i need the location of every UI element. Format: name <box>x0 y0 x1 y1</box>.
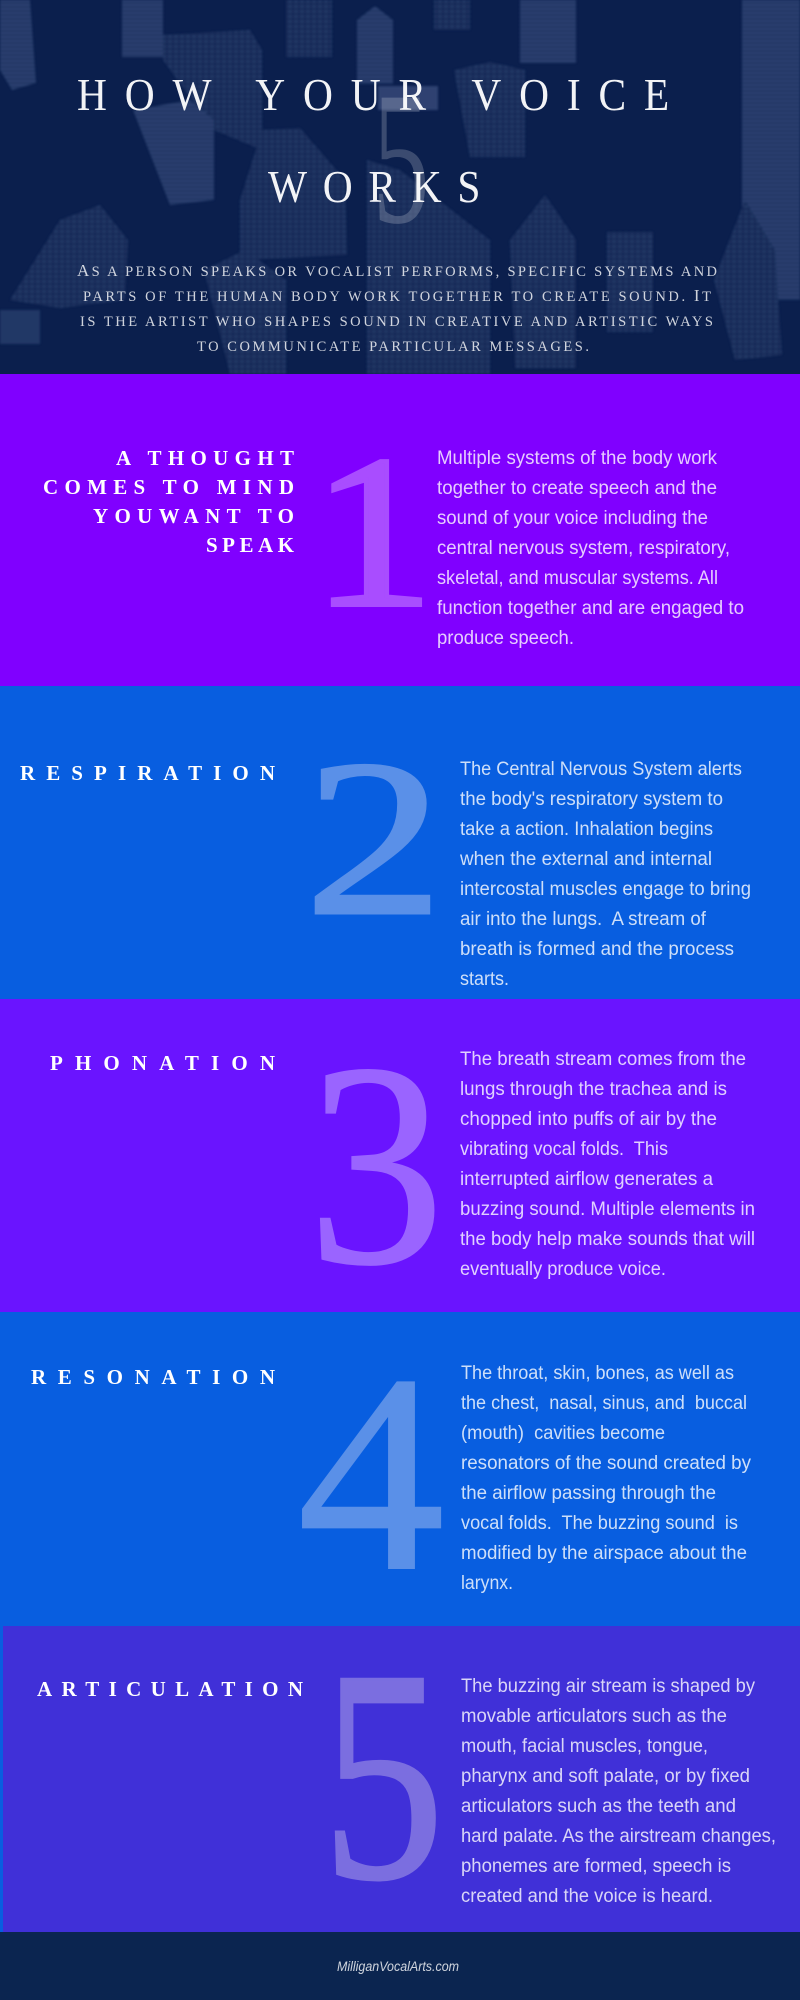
heading: a thought comes to mind: COMES TO MIND <box>43 475 294 499</box>
intro text: TO COMMUNICATE PARTICULAR MESSAGES. <box>197 339 589 355</box>
body text: modified by the airspace about the <box>461 1543 747 1564</box>
body text: the chest, nasal, sinus, and buccal <box>461 1393 747 1414</box>
body text: vocal folds. The buzzing sound is <box>461 1513 738 1534</box>
body text: sound of your voice including the <box>437 508 708 529</box>
body text: eventually produce voice. <box>460 1259 666 1280</box>
title: HOW YOUR VOICE <box>77 70 669 121</box>
body text: the airflow passing through the <box>461 1483 716 1504</box>
body text: The throat, skin, bones, as well as <box>461 1363 734 1384</box>
numeral 4: 4 <box>297 1318 445 1630</box>
body text <box>459 759 751 990</box>
body text: The Central Nervous System alerts <box>460 759 742 780</box>
intro text: IS THE ARTIST WHO SHAPES SOUND IN CREATIVE AND ARTISTIC WAYS <box>80 314 713 330</box>
heading: respiration: RESPIRATION <box>20 761 275 785</box>
body text: Multiple systems of the body work <box>437 448 717 469</box>
body text: starts. <box>460 969 509 990</box>
panel: step 3 phonation <box>0 999 800 1325</box>
body text: interrupted airflow generates a <box>460 1169 713 1190</box>
numeral 2: 2 <box>304 714 444 962</box>
heading: a thought comes to mind: YOUWANT TO <box>93 504 294 528</box>
body text: mouth, facial muscles, tongue, <box>461 1736 708 1757</box>
heading: articulation: ARTICULATION <box>37 1677 303 1701</box>
body text: (mouth) cavities become <box>461 1423 665 1444</box>
footer website: MilliganVocalArts.com <box>337 1959 459 1974</box>
heading: a thought comes to mind: A THOUGHT <box>116 446 294 470</box>
heading: phonation: PHONATION <box>50 1051 275 1075</box>
body text: when the external and internal <box>459 849 712 870</box>
body text: The buzzing air stream is shaped by <box>461 1676 755 1697</box>
heading: a thought comes to mind <box>43 446 295 557</box>
body text: central nervous system, respiratory, <box>437 538 730 559</box>
numeral 3: 3 <box>308 1003 444 1325</box>
panel: footer <box>0 1932 800 2000</box>
body text: buzzing sound. Multiple elements in <box>460 1199 755 1220</box>
numeral 5: 5 <box>322 1609 444 1943</box>
background image: aerial city skyline <box>0 0 800 374</box>
body text: the body's respiratory system to <box>460 789 723 810</box>
panel: step 4 resonation <box>0 1312 800 1630</box>
body text: breath is formed and the process <box>460 939 734 960</box>
body text: pharynx and soft palate, or by fixed <box>461 1766 750 1787</box>
body text: produce speech. <box>437 628 574 649</box>
body text <box>461 1363 751 1594</box>
faint numeral 5: 5 <box>373 52 429 263</box>
title: WORKS <box>268 162 480 213</box>
body text: The breath stream comes from the <box>460 1049 746 1070</box>
body text: vibrating vocal folds. This <box>460 1139 668 1160</box>
body text: skeletal, and muscular systems. All <box>437 568 718 589</box>
body text: created and the voice is heard. <box>461 1886 713 1907</box>
body text: air into the lungs. A stream of <box>460 909 707 930</box>
body text: resonators of the sound created by <box>461 1453 751 1474</box>
title <box>77 70 669 213</box>
body text: chopped into puffs of air by the <box>460 1109 717 1130</box>
body text: take a action. Inhalation begins <box>460 819 713 840</box>
numeral 1: 1 <box>311 412 435 653</box>
body text <box>460 1049 755 1280</box>
heading: a thought comes to mind: SPEAK <box>206 533 295 557</box>
panel: step 2 respiration <box>0 686 800 999</box>
body text <box>437 448 744 649</box>
body text: lungs through the trachea and is <box>460 1079 727 1100</box>
intro text: AS A PERSON SPEAKS OR VOCALIST PERFORMS, SPECIFIC SYSTEMS AND <box>77 261 717 280</box>
intro text <box>77 261 717 355</box>
body text <box>461 1676 776 1907</box>
body text: together to create speech and the <box>437 478 717 499</box>
panel: header <box>0 0 800 374</box>
heading: resonation: RESONATION <box>31 1365 275 1389</box>
body text: articulators such as the teeth and <box>461 1796 736 1817</box>
panel: step 1 thought <box>0 374 800 686</box>
body text: larynx. <box>461 1573 513 1594</box>
body text: movable articulators such as the <box>461 1706 727 1727</box>
body text: phonemes are formed, speech is <box>461 1856 731 1877</box>
body text: hard palate. As the airstream changes, <box>461 1826 776 1847</box>
body text: the body help make sounds that will <box>460 1229 755 1250</box>
body text: function together and are engaged to <box>437 598 744 619</box>
body text: intercostal muscles engage to bring <box>460 879 751 900</box>
panel: step 5 articulation <box>0 1609 800 1943</box>
intro text: PARTS OF THE HUMAN BODY WORK TOGETHER TO CREATE SOUND. IT <box>83 286 711 305</box>
